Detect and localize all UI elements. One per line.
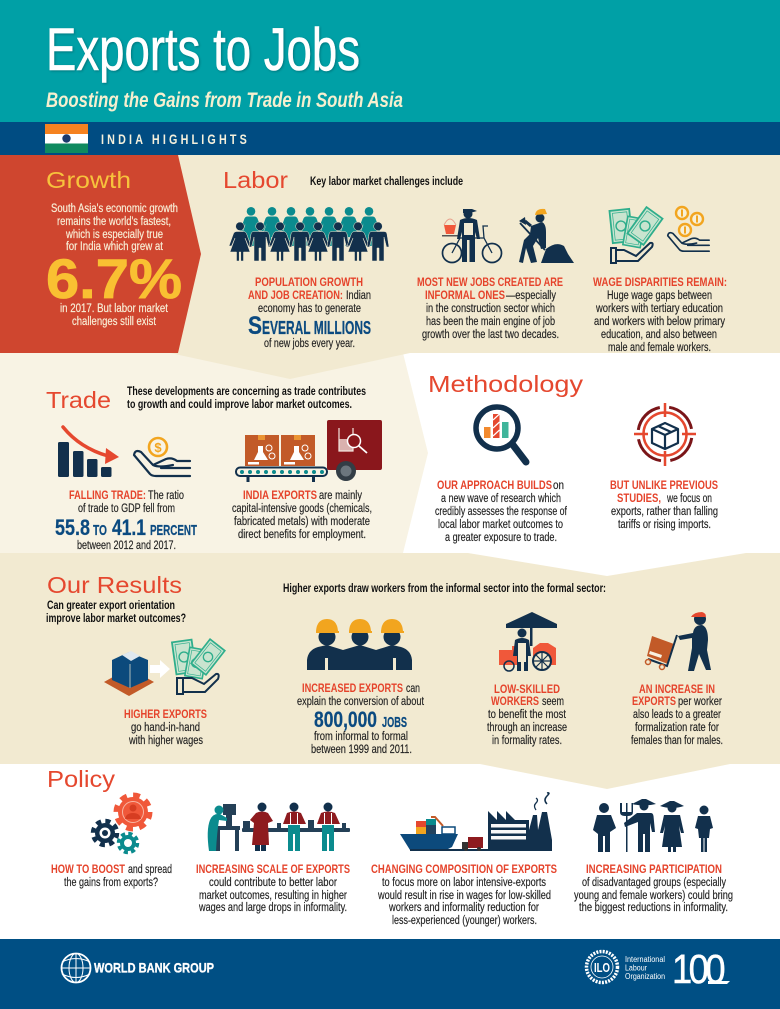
text: india exports: capital-intensive goods (chemicals, — [232, 501, 372, 515]
text: most new jobs: —especially — [506, 288, 557, 302]
heading: growth: Growth — [46, 167, 131, 193]
text: increased exports: INCREASED EXPORTS — [302, 681, 403, 695]
text: trade intro: to growth and could improve labor market outcomes. — [127, 397, 352, 411]
icon: coin and hand — [134, 438, 190, 476]
panel: policy — [47, 766, 733, 927]
text: falling trade: FALLING TRADE: — [69, 488, 146, 502]
text: low-skilled workers: in formality rates. — [492, 733, 562, 747]
text: changing composition of exports — [371, 862, 557, 927]
text: low-skilled workers: through an increase — [487, 720, 567, 734]
text: population growth — [248, 275, 371, 350]
logo: international labour organization: Labour — [625, 964, 647, 972]
text: increasing scale of exports: market outcomes, resulting in higher — [199, 888, 347, 902]
text: increased exports: from informal to formal — [314, 729, 408, 743]
text: increase in exports per worker — [631, 682, 723, 747]
text: increasing participation — [574, 862, 733, 914]
text: india exports: direct benefits for employment. — [238, 527, 366, 541]
text: india exports: INDIA EXPORTS — [243, 488, 317, 502]
icon: coin and hand: $ — [154, 440, 162, 455]
text: how to boost: the gains from exports? — [64, 875, 158, 889]
text: wage disparities: workers with tertiary education — [595, 301, 723, 315]
text: low-skilled workers: WORKERS — [491, 694, 539, 708]
label: india highlights: INDIA HIGHLIGHTS — [101, 132, 250, 147]
text: changing composition of exports: would result in rise in wages for low-skilled — [377, 888, 551, 902]
text: but unlike previous studies — [610, 478, 718, 531]
text: question — [46, 598, 186, 625]
icon: gears — [93, 795, 150, 852]
icon: street vendor — [499, 612, 557, 671]
text: increase in exports per worker: formalization rate for — [635, 720, 719, 734]
text: falling trade: 41.1 — [112, 515, 146, 540]
text: but unlike previous studies: we focus on — [666, 491, 712, 505]
text: growth description: remains the world's fastest, — [57, 214, 171, 228]
stat: 6.7%: 6.7% — [46, 247, 182, 310]
icon: india flag — [45, 124, 88, 153]
text: wage disparities: WAGE DISPARITIES REMAIN: — [593, 275, 727, 289]
heading: methodology: Methodology — [428, 371, 583, 397]
logo: international labour organization: International — [625, 955, 665, 964]
text: increasing participation: INCREASING PARTICIPATION — [586, 862, 722, 876]
icon: cyclist vendor — [442, 209, 502, 262]
text: but unlike previous studies: STUDIES, — [617, 491, 661, 505]
text: our approach builds: local labor market outcomes to — [438, 517, 563, 531]
title: Exports to Jobs — [46, 16, 360, 83]
text: wage disparities: education, and also between — [601, 327, 717, 341]
text: growth follow-up — [60, 301, 168, 328]
text: wage disparities: male and female workers. — [608, 340, 711, 354]
logo: international labour organization: Organization — [625, 972, 665, 981]
text: growth description — [51, 201, 178, 253]
text: our approach builds: on — [553, 478, 564, 492]
panel: growth — [0, 155, 201, 353]
text: population growth: of new jobs every year. — [264, 336, 355, 350]
text: increasing scale of exports: could contribute to better labor — [209, 875, 337, 889]
text: india exports: are mainly — [319, 488, 363, 502]
icon: construction digger — [519, 209, 574, 263]
text: changing composition of exports: to focus more on labor intensive-exports — [382, 875, 546, 889]
text: increase in exports per worker: per worker — [678, 694, 722, 708]
text: how to boost: and spread — [128, 862, 172, 876]
logo: international labour organization: 100 — [672, 946, 725, 992]
text: falling trade: 55.8 — [55, 515, 90, 540]
text: falling trade: of trade to GDP fell from — [78, 501, 175, 515]
text: falling trade — [55, 488, 197, 552]
text: increased exports: JOBS — [382, 714, 407, 731]
logo: international labour organization — [586, 946, 730, 992]
text: but unlike previous studies: tariffs or rising imports. — [618, 517, 711, 531]
logo: international labour organization: ILO — [594, 960, 610, 975]
text: how to boost: HOW TO BOOST — [51, 862, 125, 876]
text: higher exports: HIGHER EXPORTS — [124, 707, 207, 721]
text: most new jobs: MOST NEW JOBS CREATED ARE — [417, 275, 563, 289]
text: question: improve labor market outcomes? — [46, 611, 186, 625]
icon: three workers with hard hats — [307, 619, 412, 670]
heading: policy: Policy — [47, 766, 115, 792]
text: question: Can greater export orientation — [47, 598, 175, 612]
text: india exports: fabricated metals) with moderate — [234, 514, 370, 528]
text: population growth: POPULATION GROWTH — [255, 275, 363, 289]
text: low-skilled workers — [487, 682, 567, 747]
text: growth description: for India which grew at — [66, 239, 163, 253]
text: falling trade: between 2012 and 2017. — [77, 538, 176, 552]
icon: crowd of people — [229, 207, 389, 261]
text: increasing scale of exports: INCREASING SCALE OF EXPORTS — [196, 862, 350, 876]
text: most new jobs: has been the main engine of job — [426, 314, 555, 328]
text: trade intro — [127, 384, 366, 411]
text: increased exports: between 1999 and 2011. — [311, 742, 412, 756]
text: our approach builds: a new wave of research which — [441, 491, 561, 505]
text: higher exports — [124, 707, 207, 747]
footer — [0, 939, 780, 1009]
text: low-skilled workers: LOW-SKILLED — [494, 682, 560, 696]
icon: factory workers at bench — [208, 802, 350, 851]
text: most new jobs: INFORMAL ONES — [425, 288, 505, 302]
text: our approach builds: credibly assesses the response of — [435, 504, 567, 518]
text: falling trade: The ratio — [148, 488, 184, 502]
icon: coins and hand — [668, 207, 709, 251]
text: higher exports: with higher wages — [128, 733, 203, 747]
text: population growth: Indian — [346, 288, 371, 302]
text: changing composition of exports: less-experienced (younger) workers. — [392, 913, 537, 927]
text: wage disparities — [593, 275, 727, 354]
text: results intro: Higher exports draw workers from the informal sector into the formal sector: — [283, 581, 606, 595]
text: increasing scale of exports: wages and large drops in informality. — [198, 900, 347, 914]
heading: labor: Labor — [223, 167, 288, 193]
text: higher exports: go hand-in-hand — [131, 720, 200, 734]
text: our approach builds: a greater exposure to trade. — [445, 530, 557, 544]
icon: target with box — [634, 403, 696, 466]
text: growth follow-up: in 2017. But labor market — [60, 301, 168, 315]
icon: disadvantaged groups — [593, 799, 713, 852]
icon: magnifier with bars — [476, 407, 526, 462]
heading: trade: Trade — [46, 387, 111, 413]
text: low-skilled workers: to benefit the most — [488, 707, 566, 721]
icon: money in hand — [609, 207, 663, 263]
text: population growth: AND JOB CREATION: — [248, 288, 343, 302]
heading: our results: Our Results — [47, 572, 182, 598]
text: low-skilled workers: seem — [542, 694, 564, 708]
text: increase in exports per worker: also leads to a greater — [633, 707, 721, 721]
text: growth description: South Asia's economic growth — [51, 201, 178, 215]
panel: methodology — [403, 353, 780, 576]
text: population growth: EVERAL MILLIONS — [262, 318, 371, 338]
text: how to boost — [51, 862, 172, 889]
panel: our results — [0, 553, 780, 789]
text: increased exports: 800,000 — [314, 707, 377, 732]
text: most new jobs — [417, 275, 563, 341]
text: but unlike previous studies: BUT UNLIKE PREVIOUS — [610, 478, 718, 492]
logo: world bank group: WORLD BANK GROUP — [94, 960, 214, 976]
text: increasing participation: the biggest reductions in informality. — [579, 900, 728, 914]
text: increase in exports per worker: EXPORTS — [632, 694, 676, 708]
text: increased exports: can — [406, 681, 420, 695]
logo: world bank group — [62, 954, 214, 982]
text: wage disparities: and workers with below primary — [594, 314, 726, 328]
icon: conveyor and truck — [236, 420, 382, 482]
text: population growth: S — [248, 312, 262, 340]
header band — [0, 0, 780, 155]
text: growth follow-up: challenges still exist — [72, 314, 156, 328]
text: increasing scale of exports — [196, 862, 350, 914]
text: increased exports: explain the conversion of about — [297, 694, 424, 708]
text: labor intro: Key labor market challenges include — [310, 174, 463, 188]
text: india exports — [232, 488, 372, 541]
icon: export box to wages — [104, 639, 225, 696]
text: trade intro: These developments are concerning as trade contributes — [127, 384, 366, 398]
icon: ship truck and factory — [400, 793, 552, 851]
text: increase in exports per worker: females than for males. — [631, 733, 723, 747]
text: our approach builds: OUR APPROACH BUILDS — [437, 478, 552, 492]
text: population growth: economy has to generate — [258, 301, 361, 315]
text: falling trade: PERCENT — [150, 522, 197, 539]
subtitle: Boosting the Gains from Trade in South Asia — [46, 89, 403, 112]
icon: falling bar chart — [58, 427, 119, 477]
text: increasing participation: of disadvantaged groups (especially — [582, 875, 727, 889]
text: changing composition of exports: CHANGING COMPOSITION OF EXPORTS — [371, 862, 557, 876]
icon: worker pushing dolly — [646, 612, 711, 671]
text: changing composition of exports: workers and informality reduction for — [388, 900, 539, 914]
text: our approach builds — [435, 478, 567, 544]
text: increasing participation: young and female workers) could bring — [574, 888, 733, 902]
text: wage disparities: Huge wage gaps between — [607, 288, 712, 302]
panel: labor — [170, 155, 780, 379]
text: increase in exports per worker: AN INCREASE IN — [639, 682, 715, 696]
text: falling trade: TO — [93, 522, 107, 539]
text: most new jobs: in the construction sector which — [426, 301, 555, 315]
text: increased exports — [297, 681, 424, 756]
text: most new jobs: growth over the last two decades. — [422, 327, 559, 341]
panel: trade — [0, 353, 430, 553]
text: but unlike previous studies: exports, rather than falling — [611, 504, 718, 518]
text: growth description: which is especially true — [65, 227, 163, 241]
